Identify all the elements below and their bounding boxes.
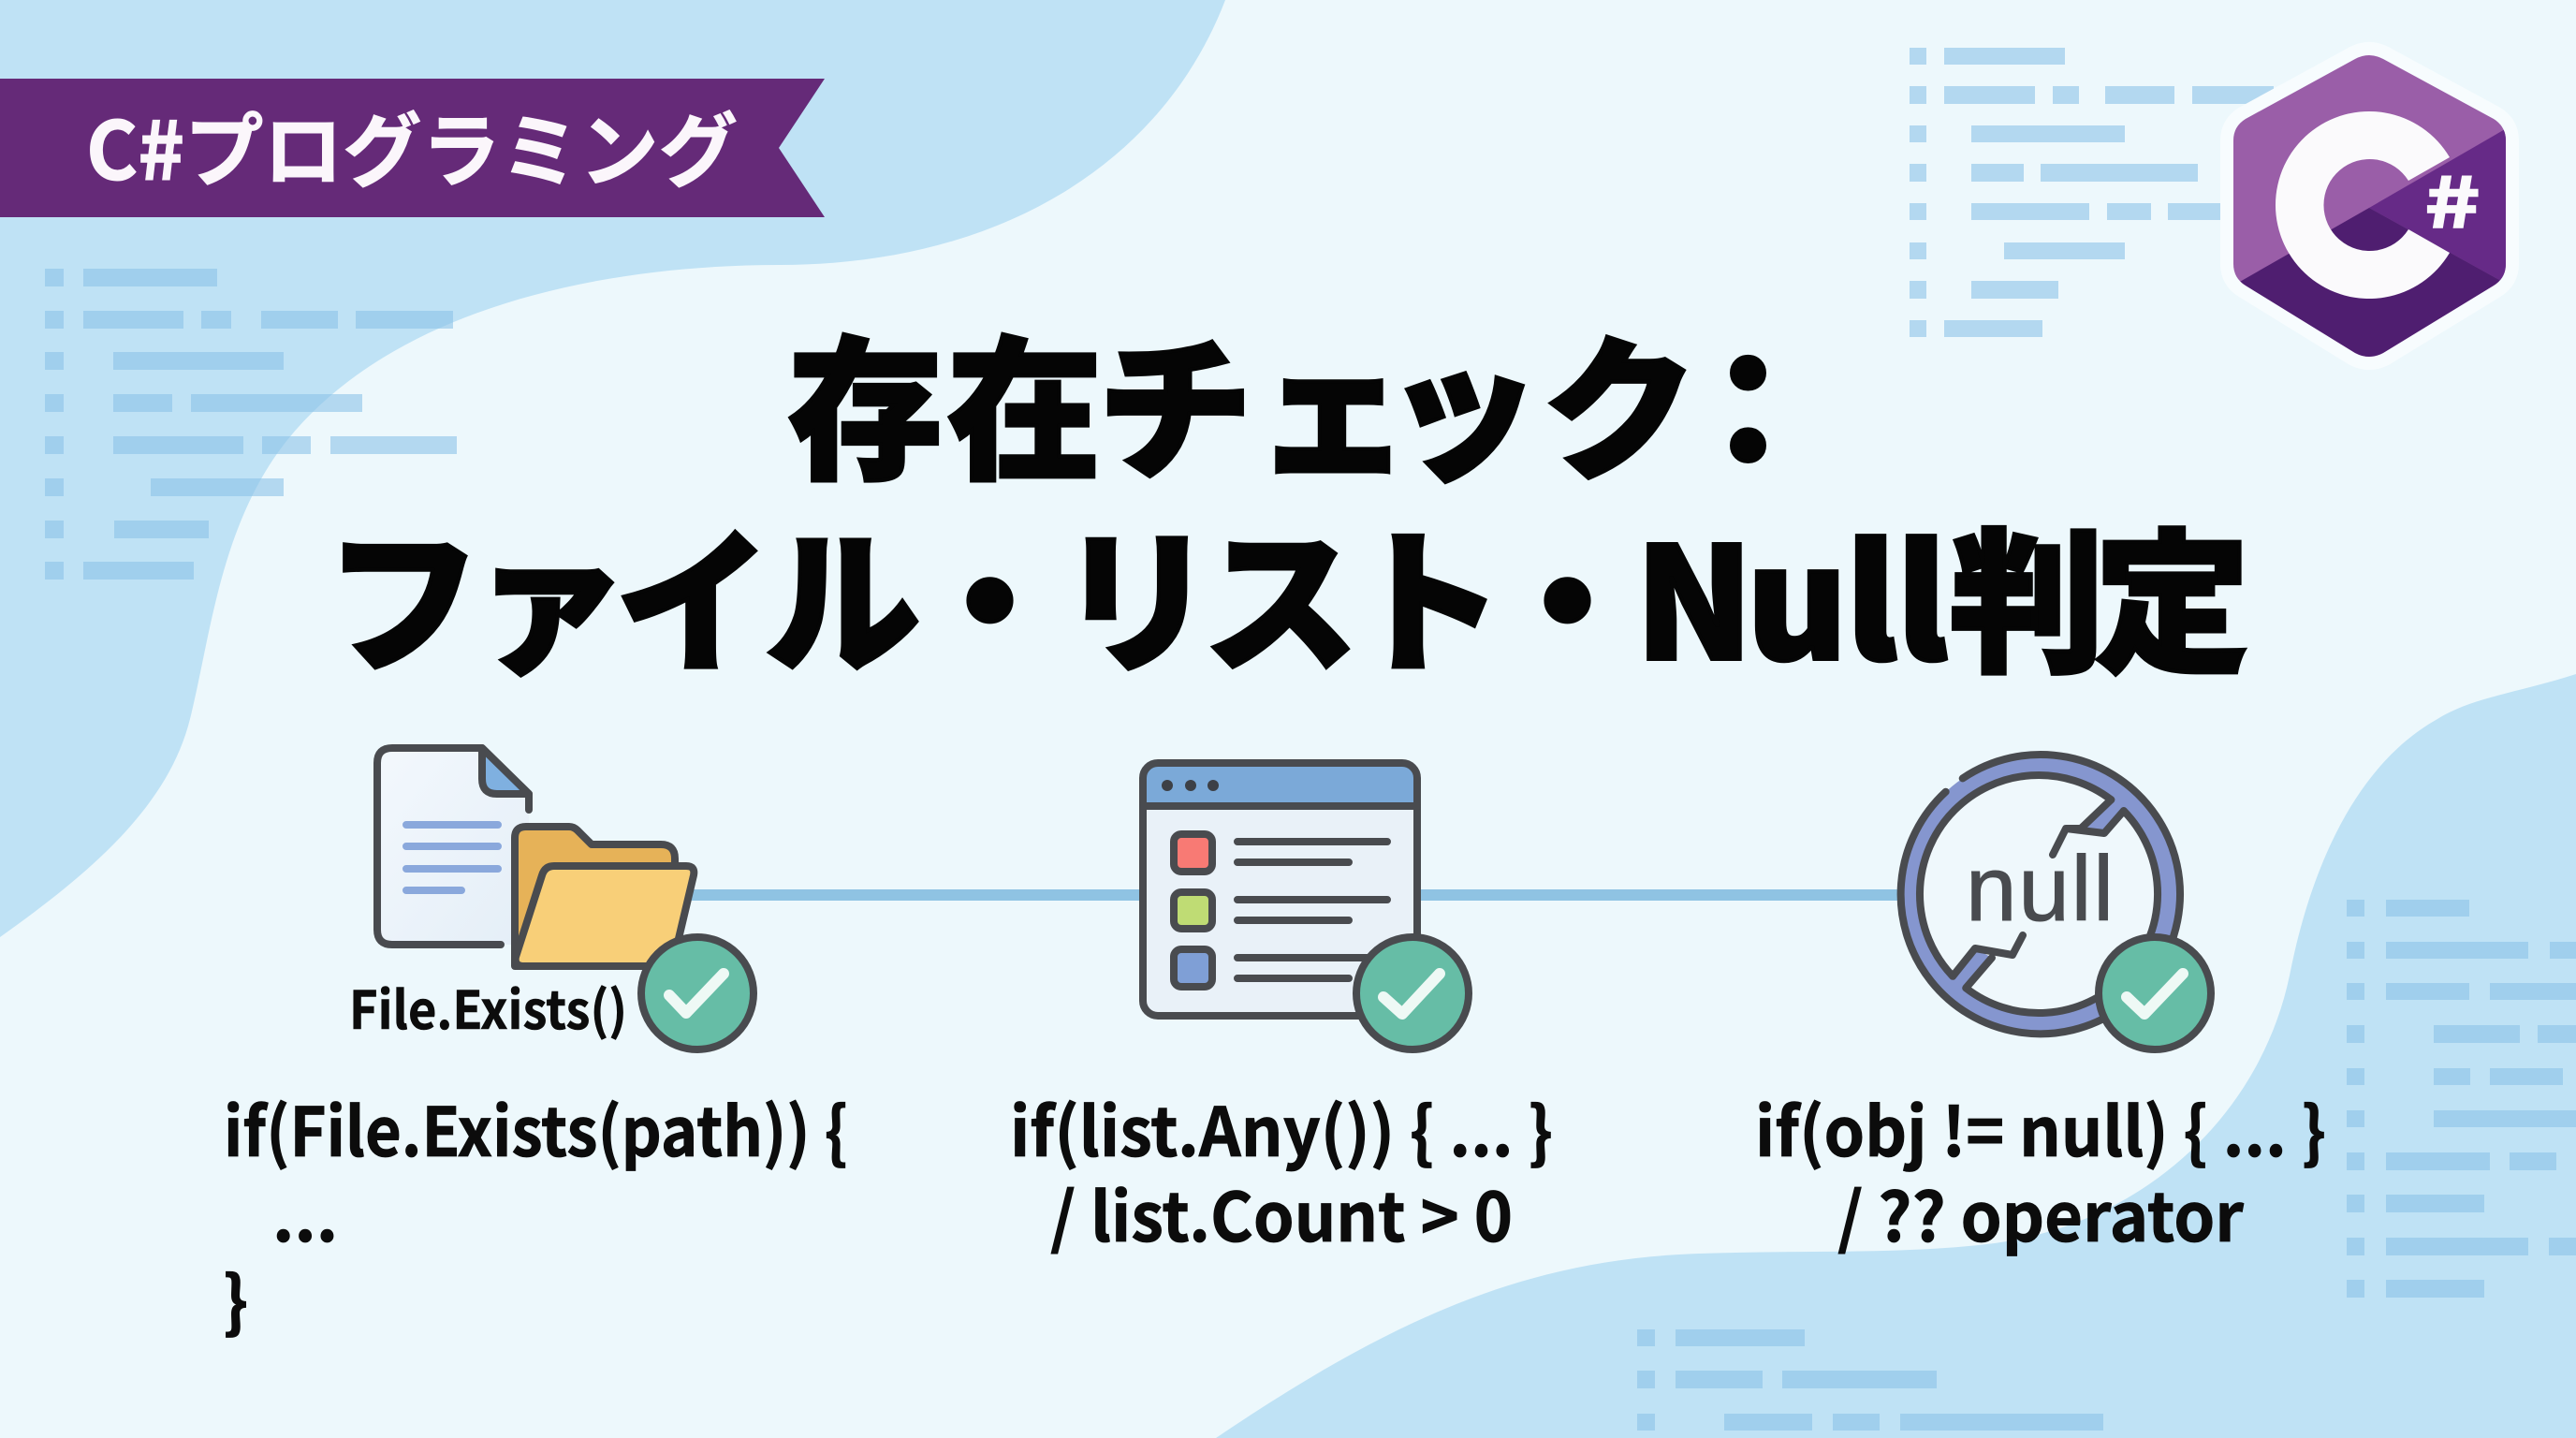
code: file check: [223, 1078, 848, 1345]
check badge: [2099, 937, 2211, 1049]
check badge: [1356, 937, 1469, 1049]
folder front: [516, 866, 694, 966]
window body: [1143, 763, 1417, 1016]
icon: null prohibited: [1901, 755, 2211, 1049]
code: list check: if(list.Any()) { ... }: [1010, 1078, 1553, 1176]
list row 3: [1174, 949, 1387, 987]
folder back: [515, 827, 675, 966]
code pattern: top right: [1910, 48, 2274, 337]
title line 2: ファイル・リスト・Null判定: [326, 480, 2249, 704]
list row 1: [1174, 834, 1387, 872]
C# logo: [2218, 47, 2518, 374]
connector line: [683, 889, 1910, 901]
check badge: [641, 937, 754, 1049]
list row 2: [1174, 892, 1387, 929]
code: file check: if(File.Exists(path)) {: [224, 1078, 848, 1176]
title line 1: 存在チェック：: [788, 287, 1825, 511]
code: file check: ...: [272, 1163, 338, 1261]
code pattern: right: [2347, 900, 2576, 1298]
background blob: bottom right: [1216, 674, 2576, 1438]
code pattern: bottom: [1637, 1329, 2103, 1431]
code: null check: if(obj != null) { ... }: [1755, 1078, 2326, 1176]
null word: null: [1966, 837, 2114, 940]
icon: list window: [1143, 763, 1469, 1049]
label: File.Exists(): File.Exists(): [349, 969, 627, 1045]
code: null check: / ?? operator: [1837, 1163, 2245, 1261]
title: [326, 287, 2249, 704]
document: [377, 748, 529, 945]
ring: [1901, 755, 2180, 1034]
background blob: top left: [0, 0, 1225, 937]
document text lines: [406, 825, 498, 890]
code: file check: }: [223, 1247, 248, 1345]
code: null check: [1755, 1078, 2326, 1261]
code pattern: left: [45, 269, 457, 580]
ribbon: C#プログラミング: [0, 79, 825, 217]
icon: file and folder: [377, 748, 754, 1049]
code: list check: / list.Count > 0: [1050, 1163, 1513, 1261]
window dots: [1162, 780, 1219, 791]
logo sharp sign: #: [2424, 148, 2481, 248]
document fold: [482, 748, 529, 794]
code: list check: [1010, 1078, 1553, 1261]
ribbon label: C#プログラミング: [86, 86, 738, 203]
